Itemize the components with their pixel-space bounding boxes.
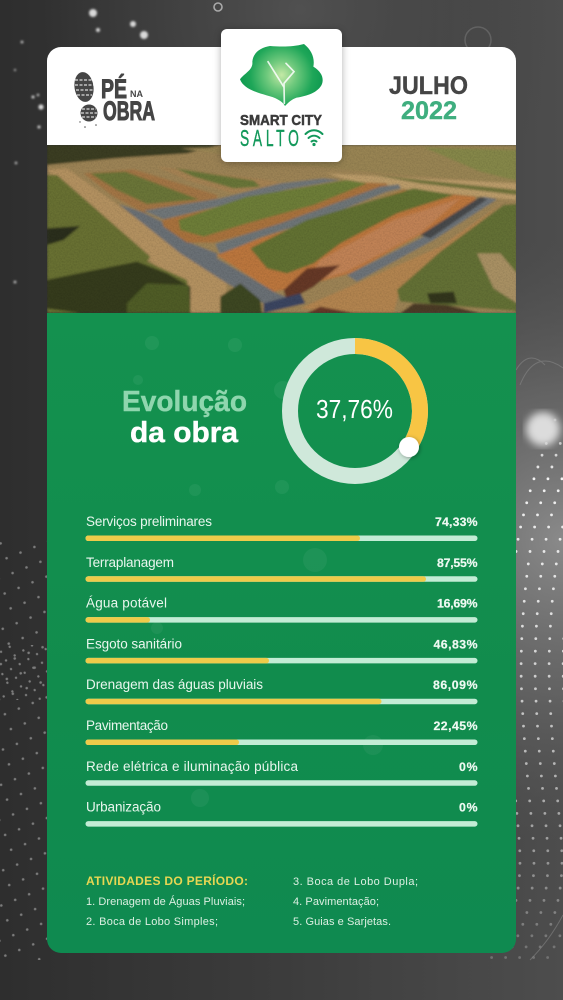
row: Drenagem das águas pluviais: Drenagem das águas pluviais (86, 677, 263, 692)
construction site aerial photo (47, 145, 517, 313)
row: Urbanização (86, 800, 478, 827)
icon: wifi (306, 130, 322, 145)
icon: green tree (240, 44, 323, 106)
row: Urbanização: Urbanização (86, 800, 161, 815)
row: Drenagem das águas pluviais: 86,09% (433, 678, 478, 692)
logo: Pé na Obra (73, 71, 155, 128)
list: left column: 2. Boca de Lobo Simples; (86, 916, 218, 928)
row: Água potável: Água potável (86, 596, 167, 611)
logo card (221, 29, 342, 162)
list: right column: 4. Pavimentação; (293, 896, 379, 908)
row: Terraplanagem: 87,55% (437, 556, 478, 570)
row: Serviços preliminares (86, 514, 478, 541)
date (389, 72, 468, 125)
row: Rede elétrica e iluminação pública (86, 759, 478, 786)
row: Esgoto sanitário: Esgoto sanitário (86, 636, 182, 651)
donut chart: 37,76%: 37,76% (316, 394, 393, 424)
list: right column (293, 876, 418, 928)
donut chart: 37,76% (290, 346, 420, 476)
list: right column: 3. Boca de Lobo Dupla; (293, 876, 418, 888)
header white band (47, 47, 516, 145)
row: Pavimentação: 22,45% (434, 719, 478, 733)
green panel (47, 313, 516, 953)
activities of the period (86, 873, 418, 928)
row: Terraplanagem (86, 555, 478, 582)
list: left column: 1. Drenagem de Águas Pluviais; (86, 895, 245, 908)
row: Terraplanagem: Terraplanagem (86, 555, 174, 570)
progress list (86, 514, 478, 827)
heading: Evolução da obra (122, 386, 247, 449)
list: right column: 5. Guias e Sarjetas. (293, 916, 391, 928)
row: Rede elétrica e iluminação pública: 0% (459, 760, 478, 774)
row: Urbanização: 0% (459, 801, 478, 815)
heading: Evolução da obra: Evolução (122, 386, 247, 418)
row: Pavimentação (86, 718, 478, 745)
text: year: 2022 (401, 97, 457, 125)
row: Serviços preliminares: Serviços preliminares (86, 514, 212, 529)
text: NA: NA (130, 89, 143, 99)
heading: Evolução da obra: da obra (130, 417, 239, 449)
row: Drenagem das águas pluviais (86, 677, 478, 704)
main card (47, 47, 517, 953)
row: Água potável: 16,69% (437, 597, 478, 611)
icon: boot print (73, 71, 98, 128)
row: Serviços preliminares: 74,33% (435, 515, 478, 529)
row: Água potável (86, 596, 478, 623)
text: SALTO: SALTO (240, 127, 299, 152)
bokeh circles (133, 336, 383, 807)
row: Esgoto sanitário: 46,83% (434, 637, 478, 651)
list: left column (86, 895, 245, 928)
text: PÉ: PÉ (101, 73, 127, 104)
heading: Atividades do período: ATIVIDADES DO PERÍODO: (86, 873, 248, 888)
text: SMART CITY: SMART CITY (240, 112, 322, 129)
text: month: JULHO (389, 72, 468, 100)
row: Rede elétrica e iluminação pública: Rede elétrica e iluminação pública (86, 759, 298, 774)
row: Esgoto sanitário (86, 636, 478, 663)
text: OBRA: OBRA (103, 96, 155, 126)
row: Pavimentação: Pavimentação (86, 718, 168, 733)
